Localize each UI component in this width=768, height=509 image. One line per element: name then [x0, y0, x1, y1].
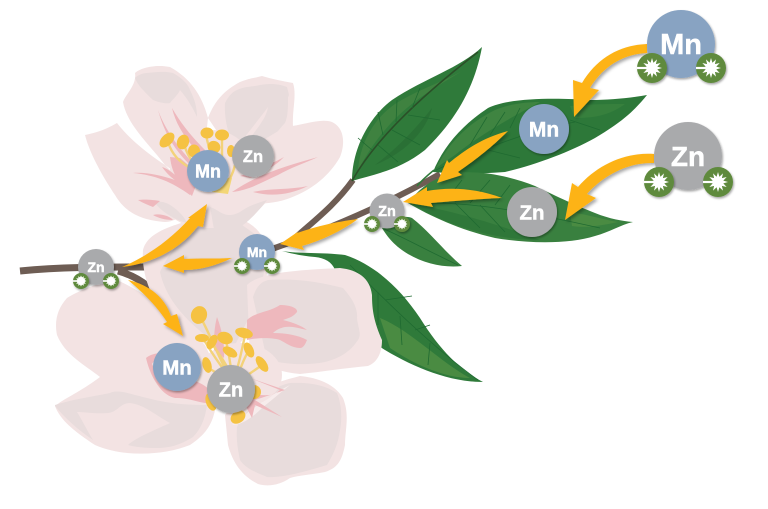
- centre base of lower blossom: [198, 343, 282, 407]
- flower: upper blossom: [85, 66, 343, 235]
- flower: lower blossom: [55, 207, 382, 485]
- atom: Zn in leaf: Zn: [519, 202, 545, 224]
- pink centre of lower blossom: [146, 305, 307, 418]
- atom: Mn in lower flower: Mn: [162, 356, 192, 380]
- atom: Zn stem node: Zn: [87, 259, 105, 275]
- petal: central back: [143, 207, 270, 350]
- arrow: branch node to Mn node: [280, 219, 358, 250]
- atom: Mn in upper flower: Mn: [195, 162, 221, 182]
- petal: left: [55, 280, 220, 454]
- atom: Zn in leaf: [507, 187, 557, 237]
- atom: Zn source with two ligands: Zn: [671, 141, 705, 172]
- atom: Mn branch node: Mn: [247, 244, 267, 260]
- leaf: upper: [352, 47, 482, 181]
- petal: top left: [123, 66, 208, 190]
- atom: Zn source with two ligands: [644, 122, 733, 197]
- stamens of lower blossom: [188, 304, 271, 427]
- petal: upper right: [247, 268, 382, 374]
- atom: Zn in upper flower: Zn: [243, 148, 263, 166]
- atom: Mn branch node: [234, 234, 280, 274]
- arrow: Mn source to leaf: [573, 44, 647, 117]
- leaf: Zn leaf: [408, 172, 633, 242]
- arrow: stem to upper flower: [122, 204, 207, 267]
- pink streaks of upper blossom: [133, 108, 318, 220]
- arrow: Zn source to leaf: [565, 154, 654, 220]
- atom: Mn in leaf: [519, 104, 569, 154]
- arrow: stem to lower flower: [128, 280, 183, 336]
- arrow: Mn leaf to branch: [437, 131, 508, 183]
- petal: lower right: [225, 376, 347, 485]
- atom: Mn in leaf: Mn: [529, 118, 559, 142]
- atom: Zn stem node: [73, 249, 119, 289]
- atom: Zn branch node: Zn: [378, 204, 396, 220]
- arrow: Mn node to stem: [163, 255, 232, 273]
- leaf: small: [382, 217, 462, 266]
- atom: Zn in lower flower: [207, 365, 255, 413]
- stamens of upper blossom: [157, 128, 235, 194]
- atom: Zn in lower flower: Zn: [219, 380, 243, 402]
- atom: Zn branch node: [364, 194, 410, 232]
- atom: Zn in upper flower: [232, 135, 274, 177]
- petal: left: [85, 123, 195, 222]
- arrow: Zn leaf to branch: [403, 187, 502, 207]
- leaf: Mn leaf: [417, 95, 647, 186]
- branch stems: [20, 174, 440, 306]
- petal: lower fold: [150, 198, 268, 235]
- atom: Mn source with two ligands: Mn: [660, 29, 702, 61]
- atom: Mn in upper flower: [187, 150, 229, 192]
- petal: top right: [208, 76, 295, 180]
- atom: Mn in lower flower: [153, 343, 201, 391]
- leaf: lower: [282, 251, 483, 382]
- petal: right: [215, 121, 343, 204]
- centre base of upper blossom: [170, 130, 254, 210]
- atom: Mn source with two ligands: [637, 10, 726, 83]
